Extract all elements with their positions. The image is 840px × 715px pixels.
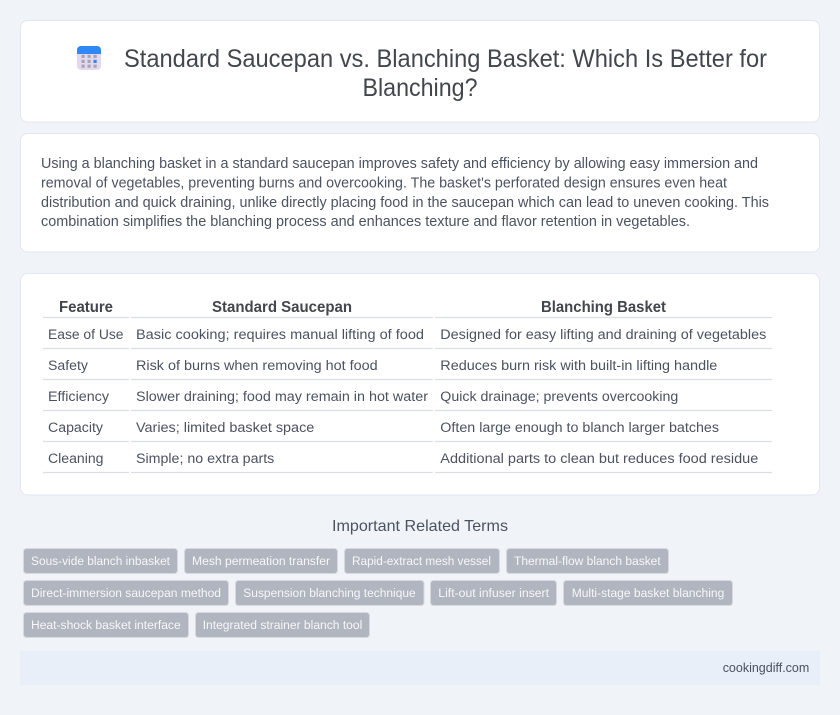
row: efficiency: Quick drainage; prevents overcooking — [440, 389, 678, 405]
row: safety — [48, 358, 717, 374]
row: ease of use: Designed for easy lifting and draining of vegetables — [440, 327, 766, 343]
tag: lift-out — [430, 580, 556, 606]
row: cleaning: Simple; no extra parts — [136, 451, 274, 467]
row: ease of use — [48, 327, 766, 343]
tag: lift-out: Lift-out infuser insert — [438, 586, 550, 600]
icon: calendar — [77, 46, 101, 70]
tag: direct-immersion — [24, 580, 228, 606]
tag: thermal-flow — [506, 548, 668, 574]
row: capacity: Varies; limited basket space — [136, 420, 314, 436]
row: cleaning: Additional parts to clean but reduces food residue — [440, 451, 758, 467]
table header — [59, 299, 666, 316]
tag: multi-stage: Multi-stage basket blanching — [572, 586, 724, 600]
tag: suspension — [236, 580, 424, 606]
tag: integrated strainer — [196, 612, 370, 638]
tag: thermal-flow: Thermal-flow blanch basket — [514, 554, 661, 568]
tag: mesh permeation: Mesh permeation transfer — [192, 554, 330, 568]
summary text: Using a blanching basket in a standard saucepan improves safety and efficiency by allowing easy immersion and — [41, 156, 758, 172]
tag: integrated strainer: Integrated strainer blanch tool — [203, 618, 362, 632]
row: capacity: Capacity — [48, 420, 104, 436]
related terms tags — [24, 548, 732, 638]
tag: heat-shock: Heat-shock basket interface — [31, 618, 181, 632]
tag: suspension: Suspension blanching technique — [243, 586, 416, 600]
tag: sous-vide: Sous-vide blanch inbasket — [31, 554, 171, 568]
summary text: combination simplifies the blanching process and enhances texture and flavor retention in vegetables. — [41, 214, 690, 230]
tag: rapid-extract: Rapid-extract mesh vessel — [352, 554, 491, 568]
tag: sous-vide — [24, 548, 178, 574]
summary text: removal of vegetables, preventing burns and overcooking. The basket's perforated design ensures even heat — [41, 176, 727, 192]
heading: important related terms: Important Related Terms — [332, 518, 508, 535]
panel: summary — [20, 134, 820, 252]
row: cleaning — [48, 451, 758, 467]
row: efficiency: Efficiency — [48, 389, 110, 405]
tag: multi-stage — [564, 580, 732, 606]
tag: heat-shock — [24, 612, 188, 638]
row: safety: Reduces burn risk with built-in lifting handle — [440, 358, 717, 374]
title: Blanching? — [362, 74, 478, 102]
title: Standard Saucepan vs. Blanching Basket: Which Is Better for — [124, 45, 767, 73]
panel: comparison table — [20, 274, 820, 495]
row: cleaning: Cleaning — [48, 451, 104, 467]
row: ease of use: Ease of Use — [48, 327, 124, 343]
footer — [20, 651, 820, 685]
table header: Standard Saucepan — [212, 299, 352, 316]
footer: cookingdiff.com — [723, 660, 809, 675]
tag: rapid-extract — [344, 548, 500, 574]
table header: Blanching Basket — [541, 299, 666, 316]
panel: header — [20, 20, 820, 122]
row: efficiency: Slower draining; food may remain in hot water — [136, 389, 428, 405]
table header: Feature — [59, 299, 113, 316]
row: safety: Risk of burns when removing hot food — [136, 358, 378, 374]
tag: direct-immersion: Direct-immersion saucepan method — [31, 586, 221, 600]
summary text — [41, 156, 769, 230]
tag: mesh permeation — [184, 548, 338, 574]
row: capacity — [48, 420, 719, 436]
row: ease of use: Basic cooking; requires manual lifting of food — [136, 327, 424, 343]
row: capacity: Often large enough to blanch larger batches — [440, 420, 719, 436]
row: efficiency — [48, 389, 678, 405]
title — [124, 45, 767, 102]
row: safety: Safety — [48, 358, 89, 374]
summary text: distribution and quick draining, unlike directly placing food in the saucepan which can lead to uneven cooking. This — [41, 195, 769, 211]
